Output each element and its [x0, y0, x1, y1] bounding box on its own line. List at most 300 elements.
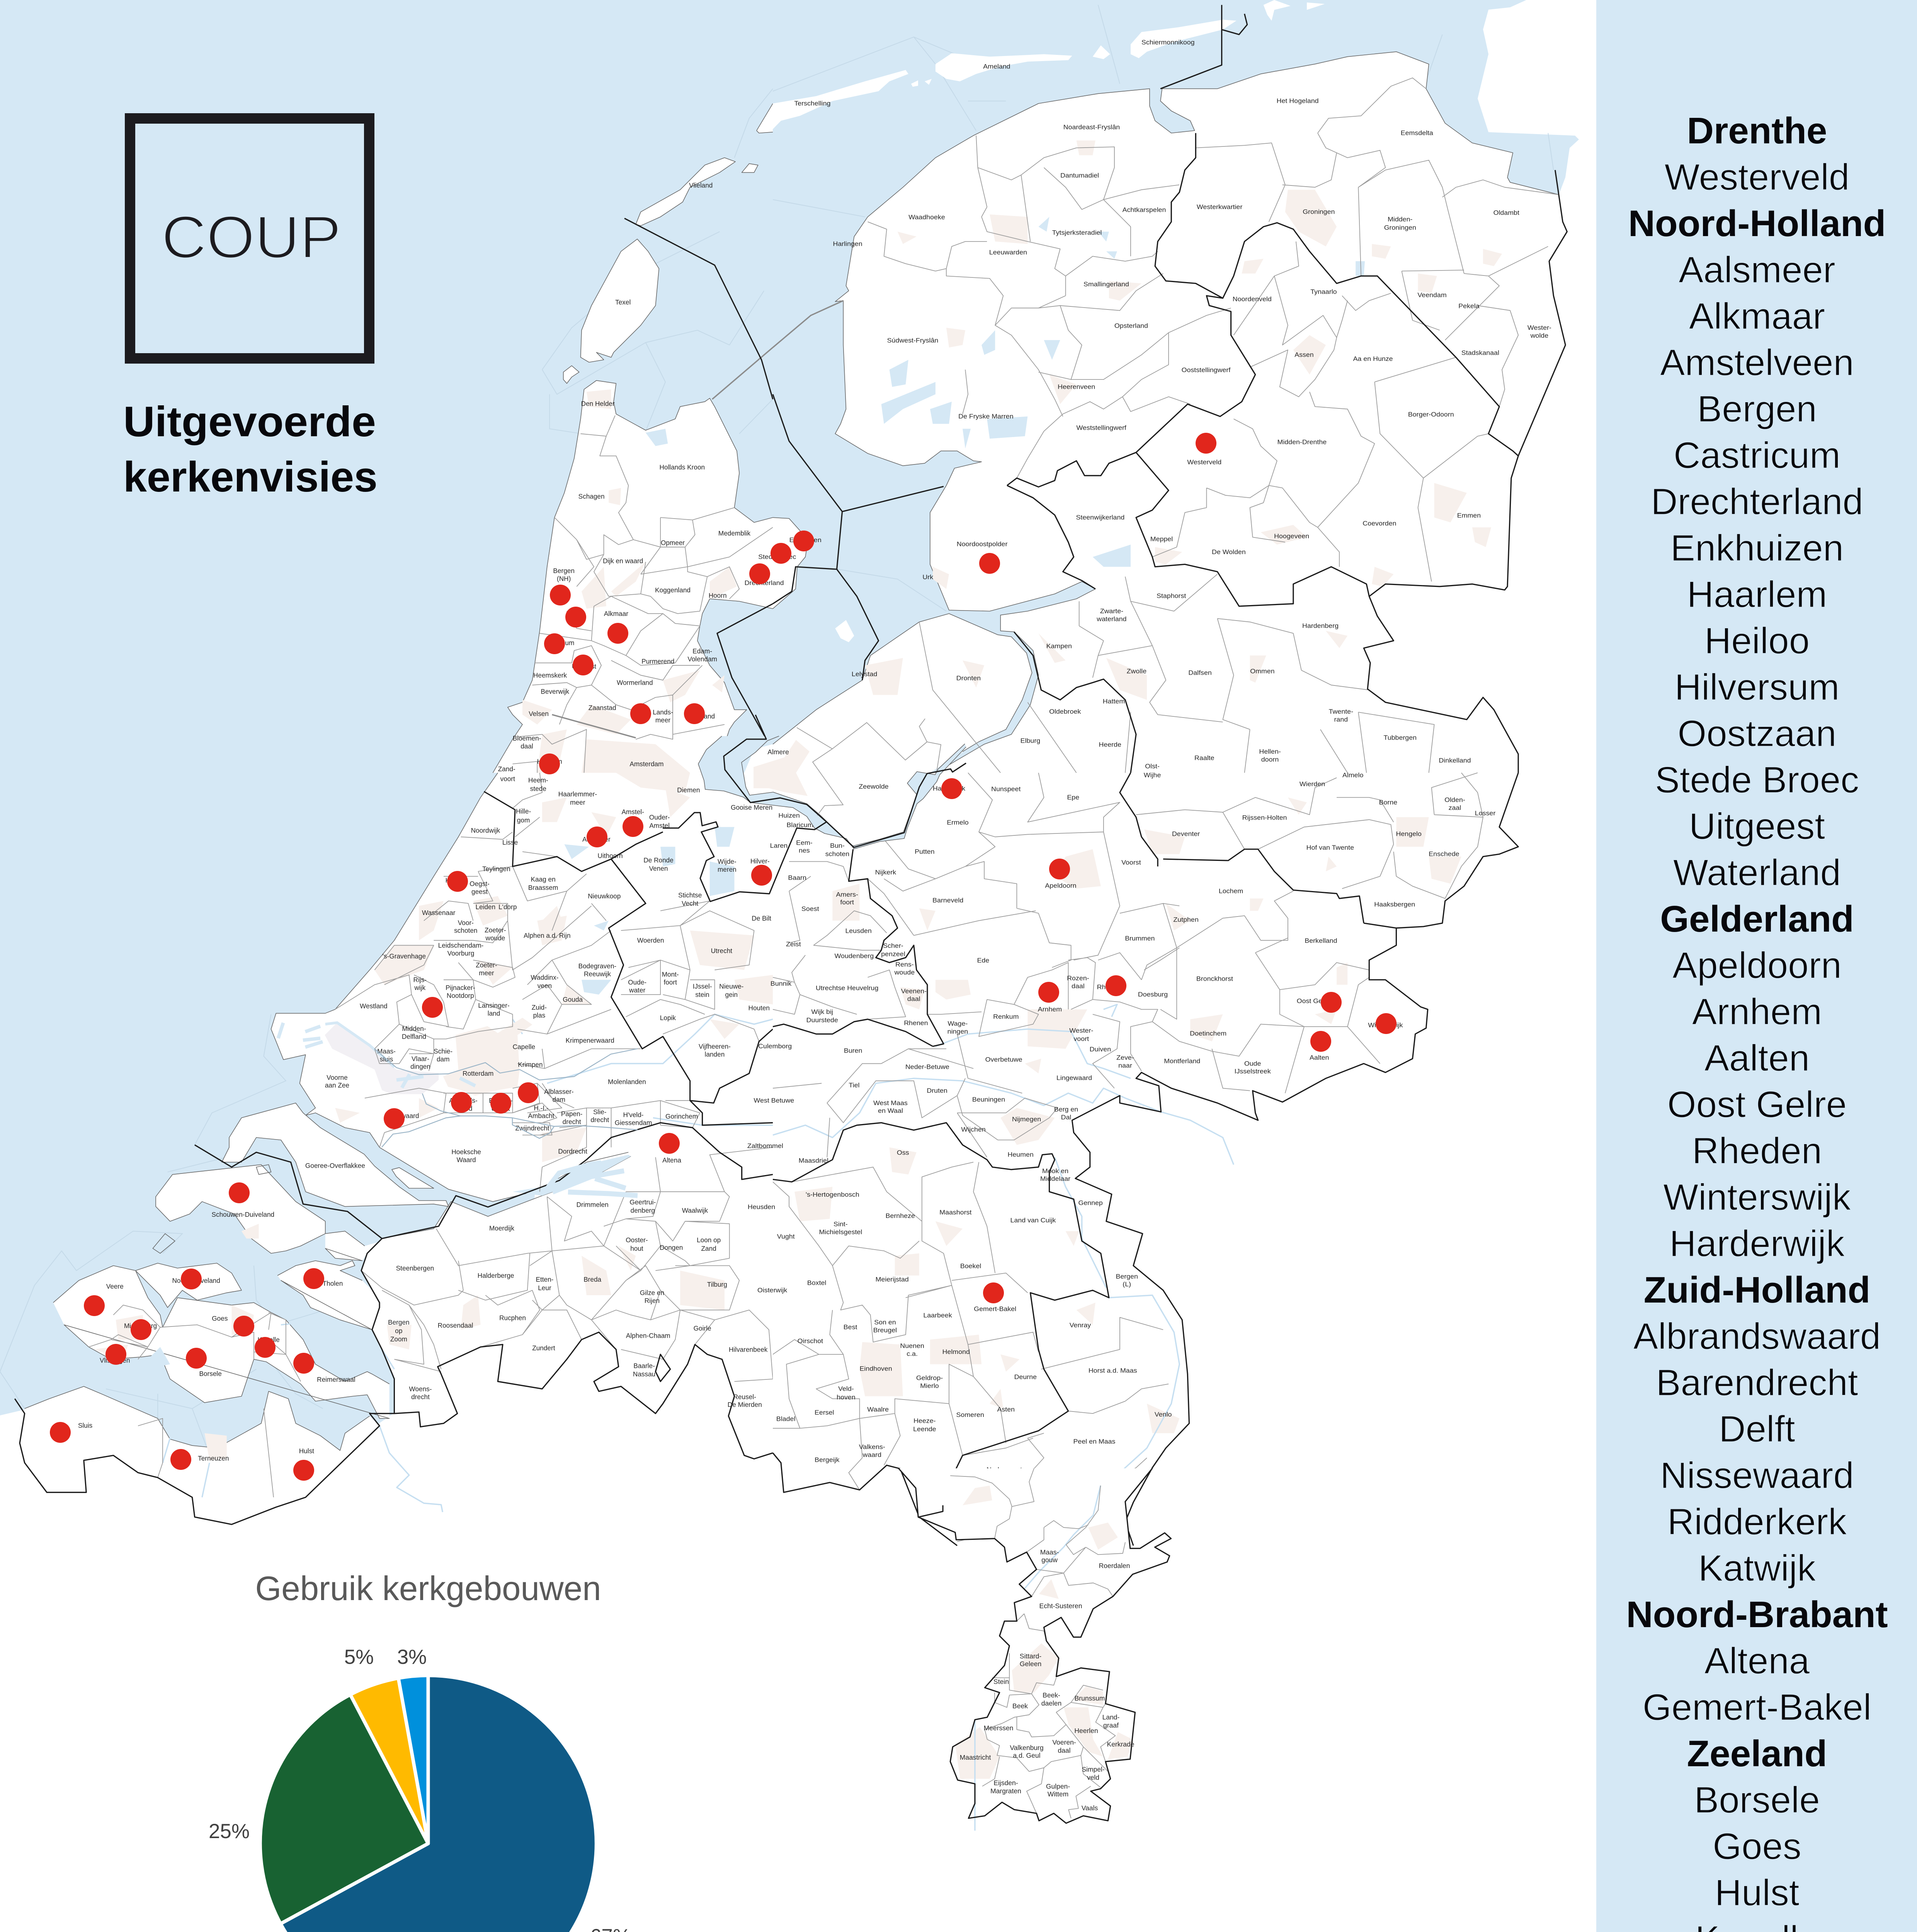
municipality names: Son en	[874, 1319, 896, 1326]
municipality names: Groningen	[1303, 208, 1335, 216]
municipality names: Wassenaar	[422, 909, 456, 917]
municipality names: De Fryske Marren	[958, 413, 1014, 420]
map tile: Zuid-Limburg	[898, 1468, 1171, 1831]
municipality names: Middelaar	[1040, 1175, 1070, 1182]
municipality names: Altena	[662, 1156, 681, 1164]
municipality names: Goes	[212, 1315, 228, 1322]
municipality names: Sluis	[78, 1422, 92, 1429]
municipality names: Midden-	[402, 1025, 426, 1032]
municipality names: Giessendam	[615, 1119, 652, 1127]
municipality names: Ede	[977, 957, 989, 964]
municipality names: Veendam	[1417, 292, 1447, 299]
municipality names: Weert	[962, 1506, 980, 1513]
municipality names: Montferland	[1164, 1058, 1200, 1065]
municipality names: Bergen	[1116, 1273, 1138, 1280]
municipality names: Hulst	[299, 1447, 314, 1455]
municipality names: Zuid-Limburg: Beek-	[1043, 1691, 1060, 1699]
municipality names: Deventer	[1172, 830, 1200, 837]
marker: Schouwen-Duiveland	[229, 1182, 250, 1203]
municipality names: Goirle	[694, 1324, 711, 1332]
municipality names	[78, 775, 772, 1462]
municipality names: Zwarte-	[1100, 608, 1123, 615]
municipality names: De Wolden	[1212, 549, 1246, 556]
municipality names: Dronten	[956, 675, 981, 682]
municipality names: Bladel	[776, 1415, 795, 1422]
municipality names: drecht	[411, 1393, 430, 1401]
municipality names: Zuid-Limburg	[960, 1548, 1135, 1812]
municipality names: Leidschendam-	[438, 941, 483, 949]
municipality names: Staphorst	[1157, 592, 1186, 599]
municipality names: Tubbergen	[1384, 734, 1417, 741]
municipality names: Heem-	[528, 776, 548, 784]
municipality names: Zuid-Limburg: Maas-	[1040, 1548, 1059, 1556]
municipality names: meer	[570, 799, 585, 806]
municipality names: Berkelland	[1305, 937, 1337, 944]
municipality names: dam	[437, 1055, 449, 1063]
municipality names: Loon op	[697, 1236, 721, 1244]
province borders	[663, 715, 966, 901]
municipality names: Hattem	[1103, 698, 1125, 705]
urban areas	[522, 389, 737, 773]
municipality names: Ambacht	[528, 1112, 555, 1120]
municipality names: Vlieland	[689, 182, 713, 189]
municipality names: Edam-	[692, 647, 712, 655]
municipality names: Tilburg	[707, 1281, 727, 1288]
municipality names: Terneuzen	[198, 1454, 229, 1462]
panel: list of municipalities	[1596, 0, 1917, 1932]
municipality names: woude	[894, 969, 915, 976]
panel: list of municipalities: Oostzaan	[1678, 713, 1836, 754]
municipality names: naar	[1118, 1062, 1132, 1069]
marker: Goes	[233, 1316, 254, 1337]
marker: Noord-Beveland	[181, 1269, 202, 1289]
municipality names: Woens-	[409, 1385, 432, 1393]
municipality names: Schagen	[578, 492, 605, 500]
municipality names: foort	[840, 899, 854, 906]
panel: list of municipalities: Altena	[1704, 1640, 1810, 1682]
municipality names: Zwijndrecht	[515, 1124, 549, 1132]
map detail: IJmeer, Gooimeer and Veluwerandmeren	[663, 715, 966, 901]
municipality names: Urk	[922, 574, 934, 581]
municipality names: Zoeter-	[476, 961, 497, 969]
municipality names: schoten	[454, 927, 477, 934]
municipality names: veen	[538, 982, 552, 990]
municipality names: Losser	[1475, 810, 1496, 817]
municipality names: Ermelo	[947, 819, 969, 826]
municipality names: Dalfsen	[1188, 669, 1212, 676]
pie slice: In transitie 5%	[350, 1678, 428, 1844]
land: Flevoland and West-Friesland	[773, 517, 1032, 773]
municipality names: Zoom	[390, 1335, 407, 1343]
municipality names: Reusel-	[733, 1393, 756, 1401]
municipality names: Coevorden	[1362, 520, 1397, 527]
municipality names: Wierden	[1300, 781, 1325, 787]
map tile: Friesland, Groningen, Drenthe, Overijssel, Flevoland	[745, 0, 1567, 773]
municipality names: Heeze-	[913, 1417, 936, 1424]
panel: list of municipalities: Ridderkerk	[1667, 1501, 1847, 1543]
marker: Harderwijk	[941, 778, 962, 799]
municipal borders: Flevoland	[797, 719, 941, 815]
municipality names: Lisse	[502, 838, 518, 846]
marker: Vlissingen	[105, 1344, 126, 1365]
municipality names: Zuid-Limburg: Kerkrade	[1107, 1740, 1135, 1748]
panel: list of municipalities: Waterland	[1673, 852, 1841, 893]
marker: Heiloo	[565, 607, 586, 628]
title: Uitgevoerde	[123, 398, 376, 446]
municipality names: Waadhoeke	[908, 214, 945, 221]
panel: list of municipalities: Uitgeest	[1689, 806, 1825, 847]
municipality names: IJsselstreek	[1235, 1068, 1271, 1075]
panel: list of municipalities: Hilversum	[1675, 667, 1839, 708]
municipality names: Waard	[457, 1156, 476, 1163]
municipality names: Stede Broec	[758, 553, 796, 560]
municipality names: Ouder-	[649, 813, 670, 821]
municipality names: Noardeast-Fryslân	[1063, 124, 1120, 131]
municipality names: Zuid-Limburg: Stein	[993, 1678, 1009, 1685]
municipality names: meer	[655, 716, 670, 724]
municipality names: Zand	[701, 1245, 716, 1252]
municipality names: Breugel	[873, 1327, 897, 1334]
municipality names: Baarle-	[633, 1362, 655, 1369]
marker: Castricum	[544, 633, 565, 654]
municipality names: Mook en	[1042, 1168, 1068, 1175]
province and sea borders	[624, 218, 773, 739]
municipality names: Tiel	[849, 1082, 859, 1089]
municipality names: Leusden	[845, 927, 872, 934]
municipality names: hoven	[837, 1394, 856, 1401]
water: Randmeren	[698, 736, 966, 849]
panel: list of municipalities: Gemert-Bakel	[1643, 1687, 1871, 1728]
title: kerkenvisies	[123, 453, 378, 501]
municipality names: De Ronde	[643, 856, 674, 864]
municipality names: Zaltbommel	[747, 1143, 783, 1150]
marker: Barendrecht	[490, 1093, 511, 1114]
municipality names: Zuid-Limburg: a.d. Geul	[1013, 1752, 1041, 1759]
municipality names: Oost Gelre	[1297, 998, 1330, 1005]
municipality names: Moerdijk	[489, 1225, 514, 1232]
municipality names: Bodegraven-	[578, 962, 616, 970]
municipality names: Neder-Betuwe	[905, 1063, 949, 1071]
municipality names: Peel en Maas	[1073, 1438, 1115, 1445]
municipality names: Kampen	[1046, 643, 1072, 650]
municipality names: Haarlemmer-	[558, 790, 597, 798]
municipality names: wijk	[414, 984, 425, 992]
municipality names: Land van Cuijk	[1010, 1217, 1056, 1224]
municipality names: Duurstede	[806, 1017, 838, 1024]
municipality names: Druten	[927, 1087, 947, 1094]
land: Walcheren, Beveland, Tholen, Zeeuws-Vlaanderen	[20, 1231, 390, 1524]
municipality names: Nieuwkoop	[588, 892, 621, 900]
municipality names: Oldambt	[1493, 209, 1519, 216]
municipality names: Het Hogeland	[1277, 97, 1319, 105]
marker: Noordoostpolder	[979, 553, 1000, 574]
municipality names: Ommen	[1250, 668, 1275, 675]
municipality names: Dongen	[660, 1243, 683, 1251]
municipality names: Medemblik	[718, 529, 750, 537]
municipality names: Rotterdam	[463, 1070, 493, 1077]
province and sea borders	[773, 5, 1567, 773]
municipality names: Uithoorn	[598, 852, 623, 859]
municipality names: Someren	[956, 1412, 984, 1418]
municipality names: drecht	[492, 1105, 510, 1112]
municipality names: Lands-	[653, 708, 673, 716]
municipality names: Kaag en	[531, 876, 556, 883]
industrial port zone	[325, 1023, 439, 1094]
municipality names: woude	[485, 934, 505, 942]
municipality names: Geldrop-	[916, 1374, 943, 1381]
municipality names: Hille-	[516, 807, 531, 815]
municipality names: Berg en	[1054, 1106, 1078, 1113]
municipality names: Zoeter-	[485, 926, 506, 934]
municipality names: Rheden	[1097, 984, 1121, 991]
land: Schouwen-Duiveland	[156, 1165, 325, 1253]
municipality names: Reimerswaal	[317, 1376, 356, 1383]
municipality names: daal	[907, 995, 920, 1002]
municipality names: Leeuwarden	[989, 249, 1027, 256]
municipality names: penzeel	[881, 951, 905, 957]
panel: list of municipalities: Oost Gelre	[1667, 1084, 1847, 1125]
municipality names: Dal	[1061, 1114, 1071, 1121]
municipality names: Culemborg	[758, 1043, 792, 1050]
municipality names: Wijchen	[961, 1126, 986, 1133]
panel: list of municipalities: Gelderland	[1660, 898, 1854, 940]
municipality names: Lingewaard	[1056, 1074, 1092, 1082]
municipality names: Opmeer	[661, 539, 685, 546]
municipality names: dam	[553, 1096, 565, 1104]
municipality names: Boxtel	[807, 1279, 826, 1286]
municipality names: Mont-	[662, 971, 679, 978]
panel: list of municipalities: Apeldoorn	[1672, 945, 1842, 986]
municipality names: De Bilt	[752, 914, 771, 922]
panel: list of municipalities: Enkhuizen	[1670, 527, 1844, 569]
municipality names: Heumen	[1008, 1151, 1034, 1158]
municipality names: Waalwijk	[682, 1207, 708, 1214]
municipality names: Zuid-	[532, 1003, 547, 1011]
municipality names: Bunnik	[771, 980, 792, 987]
municipality names: Zuid-Limburg: daelen	[1041, 1699, 1061, 1707]
panel: list of municipalities: Amstelveen	[1660, 342, 1854, 383]
municipality names: Amsterdam	[629, 760, 663, 768]
panel: list of municipalities: Bergen	[1697, 388, 1817, 430]
municipality names: Achtkarspelen	[1123, 206, 1166, 213]
chart title: Gebruik kerkgebouwen	[255, 1569, 601, 1607]
municipality names: daal	[520, 742, 533, 750]
pie slice: Herbestemd 25%	[260, 1695, 428, 1924]
panel: list of municipalities: Hulst	[1715, 1872, 1799, 1913]
pie slice: Overig 3%	[398, 1675, 428, 1844]
municipality names: Nissewaard	[384, 1112, 419, 1120]
municipality names: Assen	[1294, 351, 1314, 358]
municipality names: Zwolle	[1127, 668, 1146, 675]
municipality names: Zuid-Limburg: Geleen	[1020, 1660, 1041, 1668]
pie slice: Religieus 67%	[281, 1675, 596, 1932]
municipality names: zaal	[1449, 804, 1461, 811]
municipality names: Kapelle	[257, 1336, 280, 1344]
municipality names: Bernheze	[886, 1213, 915, 1219]
marker: Enkhuizen	[793, 531, 814, 551]
map detail: Rotterdam rivers and Biesbosch	[278, 1023, 638, 1196]
municipality names: Zeve-	[1116, 1054, 1134, 1061]
municipality names: Oisterwijk	[757, 1287, 788, 1294]
map tile: Noord-Holland and Wadden islands	[493, 89, 773, 773]
municipality names: Laren	[770, 842, 788, 849]
municipality names: Den Helder	[581, 400, 615, 408]
municipality names: Beuningen	[972, 1096, 1005, 1103]
municipality names: meren	[718, 866, 737, 873]
municipality names: Wester-	[1527, 324, 1551, 331]
municipality names: Nassau	[633, 1370, 655, 1378]
municipality names: Delfland	[402, 1032, 426, 1040]
municipality names: Zand-	[498, 765, 515, 773]
municipality names: Albrands-	[449, 1097, 478, 1104]
panel: list of municipalities: Noord-Brabant	[1626, 1594, 1888, 1635]
municipality names: Hellen-	[1259, 748, 1281, 755]
municipality names: Epe	[1067, 794, 1079, 801]
municipality names: Zuid-Limburg: Meerssen	[984, 1724, 1013, 1732]
municipality names: West Maas	[873, 1100, 908, 1107]
municipality names: L'dorp	[498, 903, 517, 911]
municipality names: land	[488, 1009, 500, 1017]
municipality names: Nootdorp	[447, 992, 474, 1000]
province and national borders	[773, 773, 1518, 1546]
municipality names: Zuid-Limburg: Brunssum	[1075, 1694, 1105, 1702]
municipality names: Harderwijk	[933, 785, 966, 792]
land: Goeree-Overflakkee and Tiengemeten	[222, 1103, 449, 1206]
municipality names: Woerden	[637, 937, 664, 944]
municipality names: Teylingen	[482, 865, 510, 873]
municipality names: Olst-	[1145, 763, 1160, 770]
municipality names: Lelystad	[852, 671, 877, 678]
municipality names: hout	[630, 1245, 643, 1252]
municipality names: Etten-	[536, 1276, 553, 1283]
municipality names: Waalre	[867, 1406, 889, 1413]
marker: Terneuzen	[170, 1449, 191, 1470]
marker: Alkmaar	[607, 623, 628, 644]
municipality names: Arnhem	[1038, 1006, 1062, 1013]
municipality names: Bloemen-	[513, 735, 541, 742]
marker: Oostzaan	[630, 703, 651, 724]
municipality names: Waddinx-	[531, 973, 558, 981]
municipality names: Súdwest-Fryslân	[887, 337, 938, 344]
marker: Apeldoorn	[1049, 859, 1070, 879]
red markers: municipalities with a kerkenvisie	[50, 433, 1397, 1481]
land: eastern provinces	[773, 773, 1518, 1546]
municipality names: Bun-	[830, 842, 845, 849]
municipality names: Rucphen	[499, 1314, 526, 1322]
municipality names: veen	[626, 816, 640, 824]
municipality names: sluis	[380, 1055, 393, 1063]
municipality names: Tholen	[323, 1279, 343, 1287]
municipality names: Buren	[844, 1047, 862, 1054]
municipality names: Wijhe	[1144, 772, 1161, 779]
municipality names: Zuid-Limburg: Echt-Susteren	[1039, 1602, 1082, 1610]
municipality names: Ooster-	[626, 1236, 648, 1244]
municipality names: Veld-	[838, 1385, 854, 1392]
urban areas	[794, 798, 1461, 1507]
marker: Kapelle	[255, 1337, 276, 1358]
municipal borders	[513, 415, 773, 773]
municipality names: Rens-	[895, 961, 914, 968]
panel: list of municipalities: Borsele	[1694, 1779, 1820, 1821]
panel: list of municipalities: Castricum	[1674, 435, 1840, 476]
municipality names: Twente-	[1329, 708, 1353, 715]
municipality names: Zuid-Limburg: gouw	[1041, 1556, 1058, 1564]
municipality names: Venlo	[1155, 1411, 1172, 1418]
panel: list of municipalities: Stede Broec	[1655, 759, 1859, 801]
municipality names: Westerkwartier	[1197, 204, 1243, 211]
municipality names: Dordrecht	[558, 1148, 587, 1155]
municipality names: Zuid-Limburg: Margraten	[990, 1787, 1021, 1795]
municipality names: Nijkerk	[875, 869, 896, 876]
municipality names: Schie-	[434, 1048, 452, 1055]
municipality names: Zuid-Limburg: Simpel-	[1082, 1765, 1105, 1773]
municipality names: Hardenberg	[1302, 622, 1339, 629]
municipality names: Gorinchem	[665, 1112, 698, 1120]
islands: Texel and Vlieland	[563, 104, 773, 773]
marker: Waterland	[684, 703, 705, 724]
municipality names: Olden-	[1444, 796, 1465, 803]
municipality names: Barend-	[489, 1097, 513, 1104]
municipality names: 's-Hertogenbosch	[806, 1191, 859, 1198]
municipality names: Best	[844, 1324, 857, 1331]
municipality names: Molenlanden	[608, 1078, 646, 1086]
marker: Uitgeest	[573, 655, 594, 675]
map of the Netherlands	[0, 0, 1579, 1831]
municipality names: Zuid-Limburg: Wittem	[1048, 1790, 1068, 1798]
municipality names: Drimmelen	[577, 1201, 609, 1208]
municipality names: Wester-	[1069, 1027, 1093, 1034]
municipality names: Katwijk	[446, 876, 466, 884]
panel: list of municipalities: Barendrecht	[1656, 1362, 1858, 1403]
data labels: 25%	[209, 1820, 250, 1843]
municipality names: Leiden	[476, 903, 495, 911]
municipality names: Cranen-	[919, 1468, 944, 1475]
municipality names: Noordoostpolder	[957, 541, 1008, 548]
marker: Delft	[422, 997, 443, 1018]
municipality names: Waterland	[685, 712, 715, 720]
municipality names: De Mierden	[728, 1401, 762, 1408]
municipality names: Eersel	[815, 1409, 834, 1416]
municipality names: Beverwijk	[541, 688, 569, 696]
municipality names: Vlaar-	[412, 1055, 429, 1063]
municipality names: Eemsdelta	[1401, 129, 1433, 136]
municipality names: Doesburg	[1138, 991, 1168, 998]
municipality names: Rijssen-Holten	[1242, 814, 1287, 821]
data labels: 5%	[344, 1646, 374, 1668]
municipality names: Veere	[106, 1282, 124, 1290]
municipality names: Roermond	[1086, 1526, 1118, 1533]
municipality names: waard	[454, 1105, 472, 1112]
municipality names: Reeuwijk	[584, 970, 611, 978]
municipality names: Vlissingen	[100, 1356, 130, 1364]
municipality names: Goeree-Overflakkee	[305, 1162, 365, 1170]
municipality names: Zuid-Limburg: veld	[1087, 1774, 1099, 1781]
municipality names: Noordenveld	[1233, 296, 1272, 303]
municipality names: Middelburg	[124, 1322, 157, 1330]
municipality names: landen	[705, 1050, 725, 1058]
municipality names: Nieuwe-	[719, 982, 743, 990]
municipality names: doorn	[1261, 756, 1279, 763]
municipality names: Oldebroek	[1049, 708, 1081, 715]
urban areas	[94, 773, 773, 1460]
municipal borders	[868, 78, 1559, 773]
marker: Hilversum	[751, 865, 772, 886]
municipality names: Zuid-Limburg: Eijsden-	[993, 1779, 1018, 1787]
marker: Reimerswaal	[293, 1353, 314, 1374]
municipality names: Amers-	[836, 891, 858, 898]
municipality names: Nijmegen	[1012, 1116, 1041, 1123]
water overlays: inland lakes	[564, 827, 734, 995]
